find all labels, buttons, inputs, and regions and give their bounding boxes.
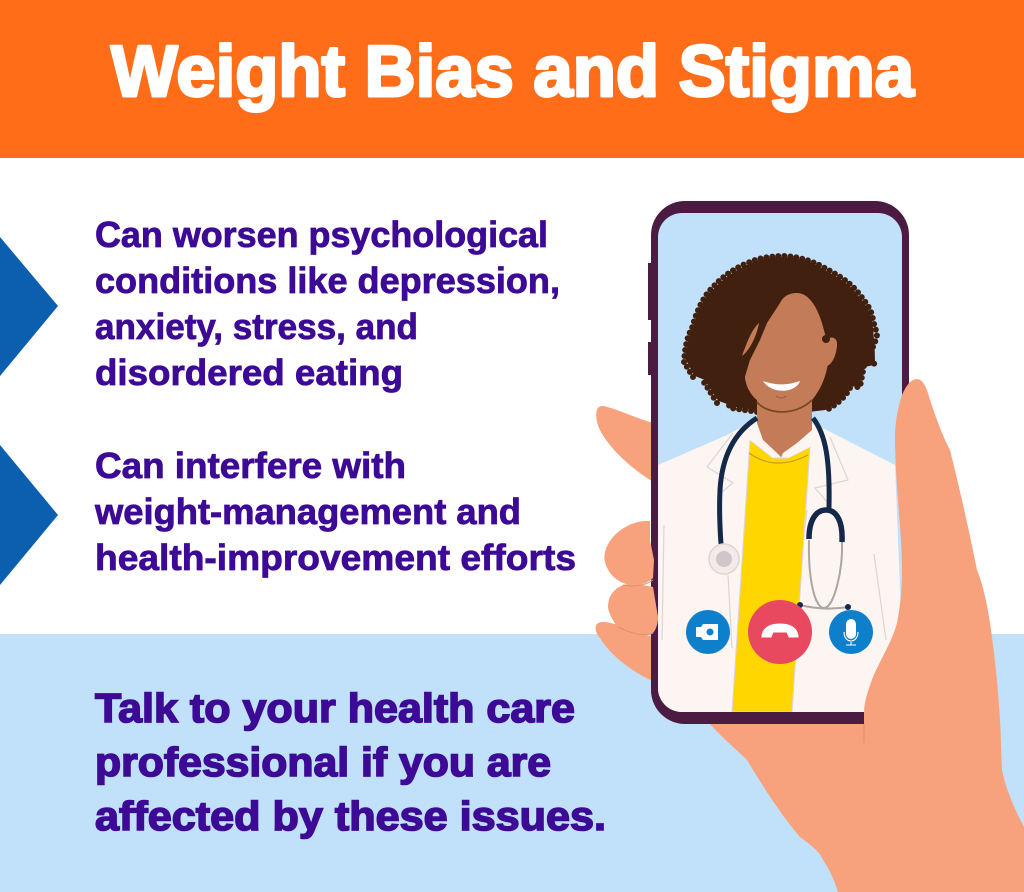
jaw shadow: [757, 400, 812, 412]
thumb and palm: [710, 379, 1024, 892]
header band: [0, 0, 1024, 158]
call button: camera: [686, 610, 730, 654]
fingers over phone edge: [604, 521, 658, 634]
arrow: first point: [0, 237, 58, 376]
call button: microphone: [829, 610, 873, 654]
ear: [827, 338, 838, 366]
text block: weight-management efforts: [94, 445, 576, 578]
ear shadow hair: [822, 335, 830, 343]
neck: [757, 395, 812, 457]
fingers behind phone: [596, 406, 660, 684]
callout text: [95, 685, 606, 839]
hair: [684, 256, 877, 412]
shirt neckline: [749, 453, 808, 463]
screen: [658, 213, 902, 712]
chest piece: [709, 544, 739, 574]
illustration: hand holding phone with doctor video call: [596, 201, 1024, 892]
doctor: [658, 256, 905, 712]
hair highlight: [742, 323, 759, 356]
callout text: Talk to your health care: [95, 685, 575, 731]
thumb crease: [863, 724, 865, 743]
coat: [658, 420, 905, 712]
phone: [648, 201, 909, 724]
finger crease: [618, 580, 653, 635]
text block: weight-management efforts: health-improvement efforts: [95, 537, 576, 578]
text block: psychological conditions: conditions like depression,: [95, 260, 560, 301]
side buttons: [648, 263, 654, 320]
collar: [750, 440, 810, 458]
navy tube: [720, 418, 757, 544]
lapel lines: [662, 433, 886, 648]
ear tube gray: [809, 540, 842, 608]
face: [745, 293, 828, 411]
bottom panel background: [0, 634, 1024, 892]
text block: weight-management efforts: Can interfere with: [95, 445, 406, 486]
callout text: affected by these issues.: [95, 793, 606, 839]
text block: psychological conditions: anxiety, stress, and: [95, 306, 418, 347]
arrow: second point: [0, 445, 58, 585]
call button: end call: [748, 600, 812, 664]
face lower: [745, 360, 828, 400]
callout text: professional if you are: [95, 739, 551, 785]
lip shadow: [776, 396, 786, 398]
stethoscope: [709, 418, 851, 610]
text block: psychological conditions: disordered eating: [95, 352, 403, 393]
title: Weight Bias and Stigma: [111, 32, 915, 112]
text block: psychological conditions: [95, 214, 560, 393]
yellow shirt: [732, 440, 810, 712]
text block: psychological conditions: Can worsen psychological: [95, 214, 548, 255]
text block: weight-management efforts: weight-management and: [94, 491, 521, 532]
smile: [763, 381, 800, 391]
